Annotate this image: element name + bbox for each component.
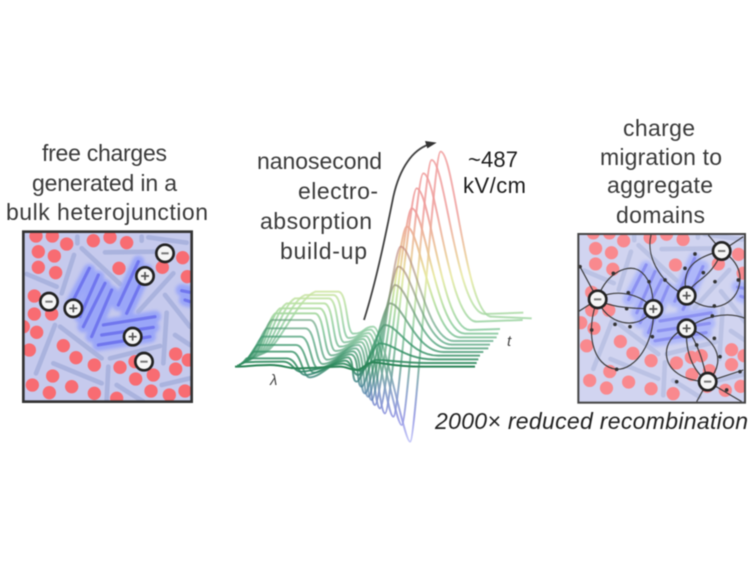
field arrows — [578, 252, 742, 392]
field lines — [578, 235, 745, 402]
heading: charge migration: aggregate — [607, 172, 713, 198]
axis label: wavelength: λ — [269, 372, 277, 389]
label: field strength: ~487 — [468, 147, 518, 172]
heading: free charges: generated in a — [32, 170, 177, 196]
infographic — [6, 118, 748, 443]
label: field strength — [463, 147, 526, 198]
arrow: build-up direction — [364, 141, 437, 320]
heading: nanosecond electro-absorption build-up: electro- — [298, 178, 378, 204]
heading: nanosecond electro-absorption build-up: nanosecond — [257, 148, 382, 174]
callout: reduced recombination: 2000× reduced recombination — [434, 408, 748, 434]
panel: bulk heterojunction — [21, 230, 194, 404]
heading: nanosecond electro-absorption build-up: absorption — [260, 208, 372, 234]
heading: free charges: free charges — [42, 140, 167, 166]
heading: charge migration: migration to — [600, 144, 722, 170]
heading: nanosecond electro-absorption build-up: build-up — [280, 238, 367, 264]
label: field strength: kV/cm — [463, 173, 526, 198]
heading: free charges — [6, 140, 208, 225]
heading: charge migration — [600, 115, 722, 228]
heading: free charges: bulk heterojunction — [6, 199, 208, 225]
heading: charge migration: domains — [616, 202, 705, 228]
charges — [40, 245, 174, 370]
panel: charge migration to aggregate domains — [571, 224, 750, 403]
heading: nanosecond electro-absorption build-up — [257, 148, 382, 264]
chart: electro-absorption spectra — [235, 152, 532, 442]
heading: charge migration: charge — [623, 115, 695, 141]
axis label: time: t — [507, 333, 512, 350]
